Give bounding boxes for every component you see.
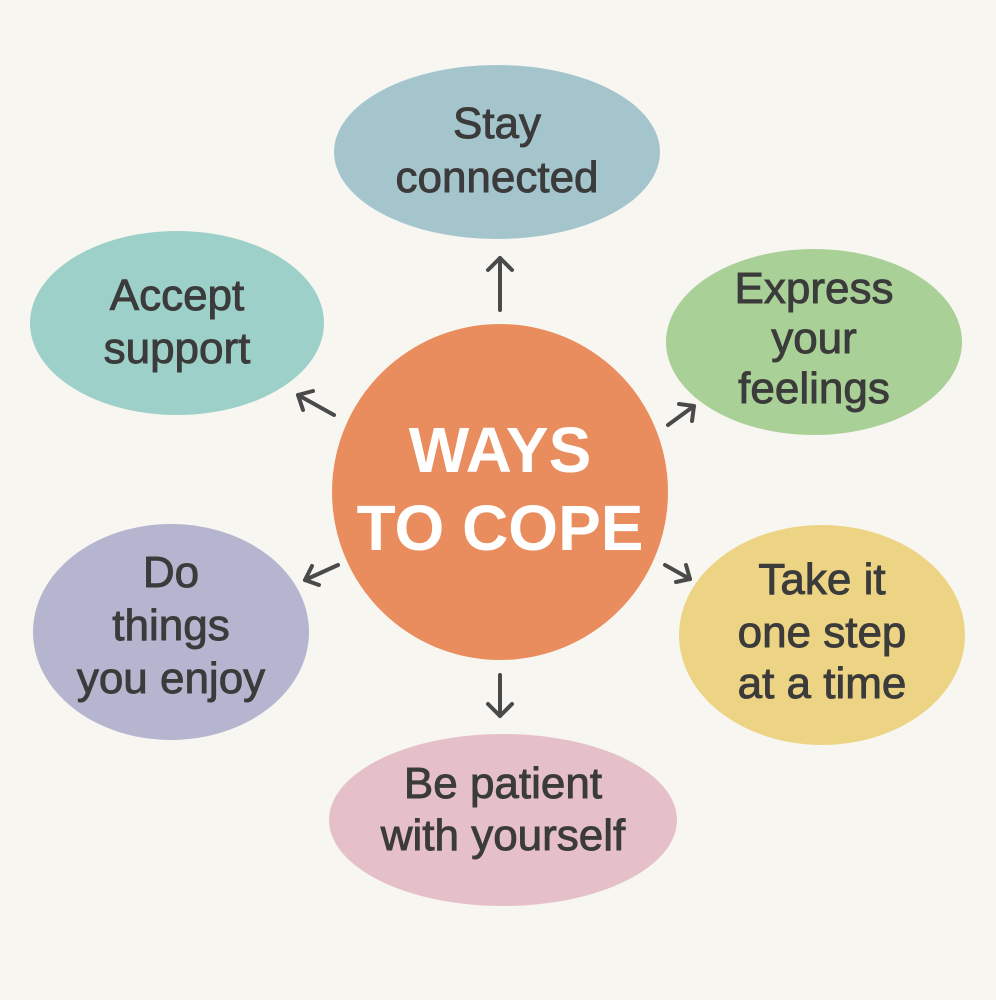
arrows bbox=[298, 258, 694, 716]
arrow: up-right bbox=[668, 404, 694, 425]
bubble: do things you enjoy: you enjoy bbox=[77, 654, 265, 703]
bubble: do things you enjoy bbox=[33, 524, 309, 740]
bubble: express your feelings: Express bbox=[735, 264, 893, 313]
bubble: take it one step at a time bbox=[679, 525, 965, 745]
bubble: be patient with yourself: with yourself bbox=[380, 811, 626, 860]
center circle: ways to cope: WAYS bbox=[409, 414, 591, 486]
arrow: down-left bbox=[305, 565, 338, 585]
bubble: accept support bbox=[30, 231, 324, 415]
center circle: ways to cope: TO COPE bbox=[357, 492, 643, 564]
arrow: up-left bbox=[298, 391, 334, 415]
bubble: express your feelings bbox=[666, 249, 962, 435]
bubble: do things you enjoy: Do bbox=[143, 548, 199, 597]
bubble: be patient with yourself bbox=[329, 734, 677, 906]
center circle: ways to cope bbox=[332, 324, 668, 660]
bubble: take it one step at a time: Take it bbox=[758, 555, 886, 604]
bubble: express your feelings: feelings bbox=[738, 364, 890, 413]
bubble: stay connected bbox=[334, 65, 660, 239]
bubble: stay connected: Stay bbox=[453, 99, 541, 148]
arrow: down-right bbox=[665, 565, 690, 582]
bubble: take it one step at a time: one step bbox=[738, 608, 906, 657]
bubble: stay connected: connected bbox=[395, 153, 599, 202]
bubble: express your feelings: your bbox=[771, 314, 857, 363]
bubble: do things you enjoy: things bbox=[112, 601, 230, 650]
bubble: be patient with yourself: Be patient bbox=[404, 759, 602, 808]
arrow: down bbox=[488, 675, 512, 716]
bubble: take it one step at a time: at a time bbox=[738, 659, 906, 708]
arrow: up bbox=[488, 258, 512, 310]
bubble: accept support: Accept bbox=[110, 271, 244, 320]
bubble: accept support: support bbox=[104, 324, 250, 373]
